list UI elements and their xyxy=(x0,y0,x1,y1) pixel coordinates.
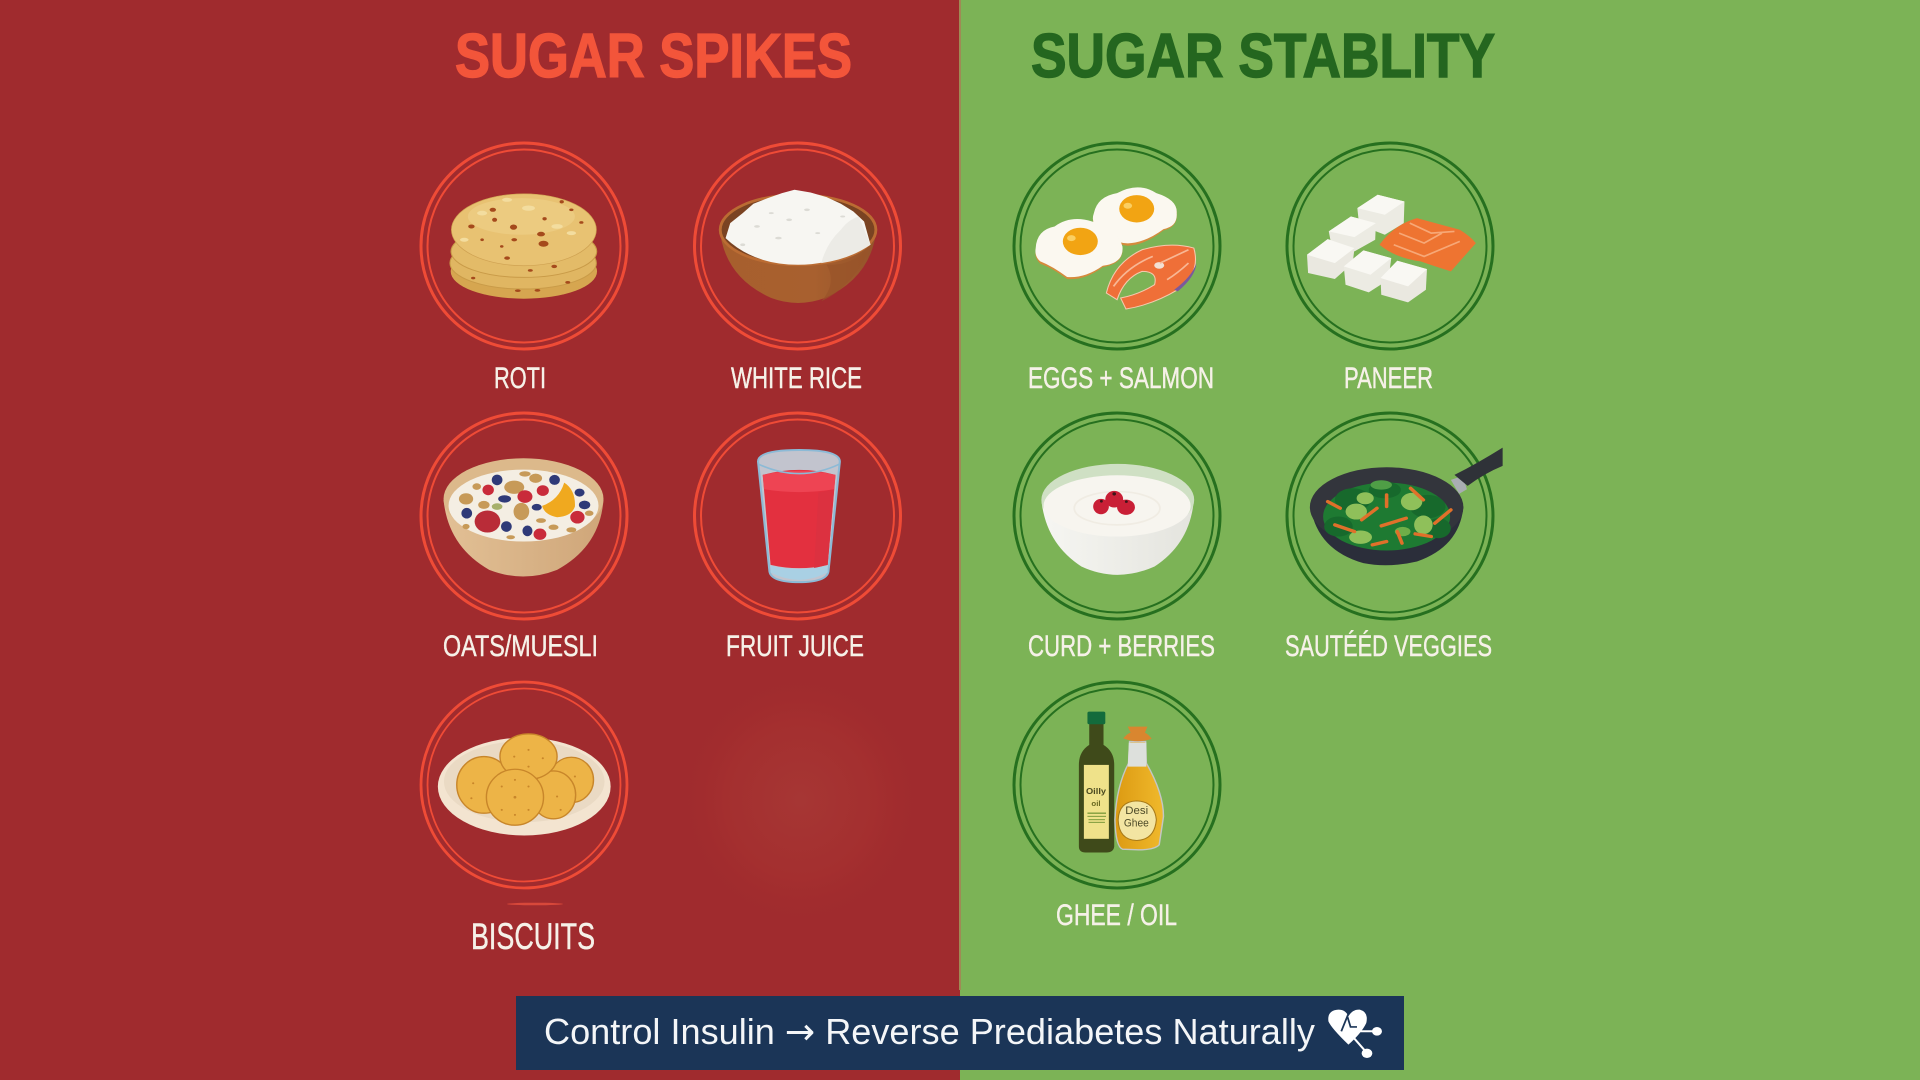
ring xyxy=(421,143,627,349)
icon: muesli bowl xyxy=(444,458,603,576)
icon: biscuit plate xyxy=(438,734,611,836)
ring xyxy=(1014,143,1220,349)
icon: oil and ghee bottles xyxy=(1079,712,1163,852)
icon: oil and ghee bottles: Ghee xyxy=(1124,817,1149,829)
icon: oil and ghee bottles: oil xyxy=(1091,799,1101,808)
icon: eggs and salmon steak xyxy=(1035,187,1196,309)
icon: curd bowl xyxy=(1041,464,1194,575)
icon: paneer cubes and salmon fillet xyxy=(1307,195,1476,302)
food item: paneer xyxy=(1287,143,1493,395)
icon: frying pan with veggies xyxy=(1310,448,1503,565)
label: roti: ROTI xyxy=(494,362,546,395)
label: ghee / oil: GHEE / OIL xyxy=(1056,899,1177,932)
food item: eggs and salmon xyxy=(1014,143,1220,395)
food item: ghee and oil xyxy=(1014,682,1220,932)
ring xyxy=(1287,413,1493,619)
label: oats muesli: OATS/MUESLI xyxy=(443,630,598,663)
ring xyxy=(694,143,900,349)
food item: curd and berries xyxy=(1014,413,1220,663)
banner text: Control Insulin → Reverse Prediabetes Naturally xyxy=(544,1010,1316,1053)
label: paneer: PANEER xyxy=(1344,362,1433,395)
icon: juice glass xyxy=(758,450,840,582)
panel: sugar stability xyxy=(959,0,1920,1080)
panel: sugar spikes xyxy=(0,0,960,1080)
ring xyxy=(421,413,627,619)
title: sugar stablity: SUGAR STABLITY xyxy=(1031,22,1495,91)
title: sugar spikes: SUGAR SPIKES xyxy=(455,22,852,91)
icon: heart network xyxy=(1328,1010,1382,1058)
icon: rice bowl xyxy=(720,190,877,303)
ring xyxy=(1014,682,1220,888)
label: eggs + salmon: EGGS + SALMON xyxy=(1028,362,1214,395)
banner: call to action xyxy=(516,996,1404,1070)
ring xyxy=(421,682,627,888)
food item: sauteed veggies xyxy=(1285,413,1503,663)
ring xyxy=(1287,143,1493,349)
label: curd + berries: CURD + BERRIES xyxy=(1028,630,1215,663)
icon: oil and ghee bottles: Desi xyxy=(1125,804,1148,817)
ring xyxy=(1014,413,1220,619)
ring xyxy=(694,413,900,619)
label: biscuits: BISCUITS xyxy=(471,916,595,957)
food item: fruit juice xyxy=(694,413,900,663)
food item: biscuits xyxy=(421,682,627,957)
label: fruit juice: FRUIT JUICE xyxy=(726,630,864,663)
food item: oats muesli xyxy=(421,413,627,663)
food item: white rice xyxy=(694,143,900,395)
label: white rice: WHITE RICE xyxy=(731,362,862,395)
icon: roti stack xyxy=(450,194,597,299)
label: sauteed veggies: SAUTÉÉD VEGGIES xyxy=(1285,630,1492,663)
icon: oil and ghee bottles: Oilly xyxy=(1086,786,1106,796)
food item: roti xyxy=(421,143,627,395)
decorative arc xyxy=(507,903,563,905)
